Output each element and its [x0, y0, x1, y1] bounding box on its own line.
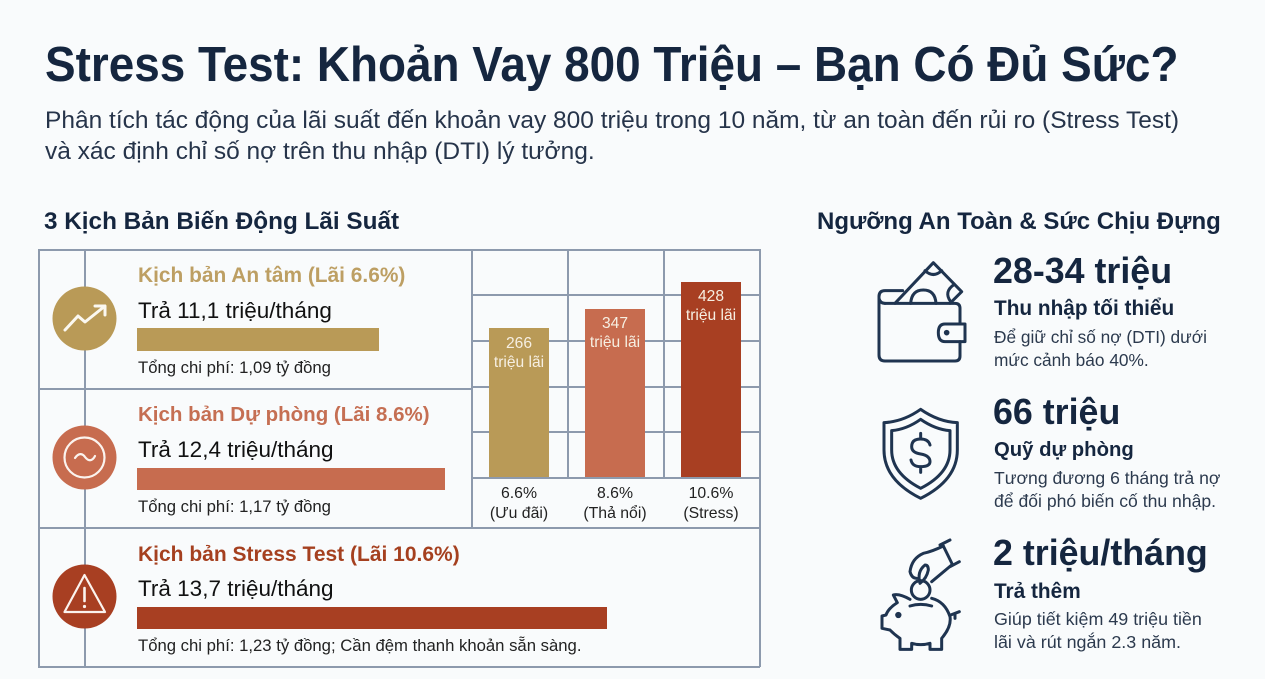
chart bar: 347 million interest — [585, 309, 645, 477]
icon: piggy bank with hand and coin — [880, 538, 961, 651]
chart bar: 428 million interest: 428 — [698, 288, 724, 305]
chart bar: 428 million interest: triệu lãi — [686, 306, 736, 324]
scenario 3 payment: Trả 13,7 triệu/tháng — [138, 576, 334, 601]
stat 3 label: Trả thêm — [994, 580, 1081, 603]
stat 1 value: 28-34 triệu — [993, 251, 1172, 291]
stat 3 description — [994, 609, 1202, 652]
scenario 1 payment: Trả 11,1 triệu/tháng — [138, 298, 332, 323]
scenario 3 bar — [137, 607, 607, 629]
chart bar: 428 million interest — [681, 282, 741, 477]
scenario 2 total cost: Tổng chi phí: 1,17 tỷ đồng — [138, 497, 331, 516]
chart bar: 266 million interest — [489, 328, 549, 477]
axis label 6.6% — [490, 485, 548, 522]
axis label 6.6%: (Ưu đãi) — [490, 505, 548, 522]
scenario 3 total cost: Tổng chi phí: 1,23 tỷ đồng; Cần đệm thanh khoản sẵn sàng. — [138, 636, 581, 655]
icon: shield with dollar — [882, 408, 959, 500]
heading: scenarios: 3 Kịch Bản Biến Động Lãi Suất — [44, 208, 399, 235]
axis label 6.6%: 6.6% — [501, 485, 537, 502]
stat 3 description: lãi và rút ngắn 2.3 năm. — [994, 632, 1181, 652]
scenario 1 bar — [137, 328, 379, 351]
stat 1 description: Để giữ chỉ số nợ (DTI) dưới — [994, 327, 1207, 347]
axis label 8.6%: 8.6% — [597, 485, 633, 502]
stat 2 description: để đối phó biến cố thu nhập. — [994, 491, 1216, 511]
subtitle text: Phân tích tác động của lãi suất đến khoản vay 800 triệu trong 10 năm, từ an toàn đến rủi ro (Stress Test) — [45, 107, 1179, 134]
axis label 10.6%: (Stress) — [683, 505, 739, 522]
axis label 8.6%: (Thả nổi) — [583, 505, 647, 522]
scenario 1 title: Kịch bản An tâm (Lãi 6.6%) — [138, 264, 405, 287]
stat 2 description: Tương đương 6 tháng trả nợ — [994, 468, 1220, 488]
chart bar: 266 million interest: triệu lãi — [494, 354, 544, 370]
subtitle text — [45, 107, 1179, 165]
axis label 10.6% — [683, 485, 739, 522]
axis label 10.6%: 10.6% — [689, 485, 733, 502]
chart bar: 266 million interest: 266 — [506, 335, 532, 352]
scenario 2 title: Kịch bản Dự phòng (Lãi 8.6%) — [138, 403, 430, 426]
stat 1 description — [994, 327, 1207, 370]
stat 2 description — [994, 468, 1220, 511]
scenario 1 total cost: Tổng chi phí: 1,09 tỷ đồng — [138, 358, 331, 377]
stat 2 value: 66 triệu — [993, 392, 1120, 432]
scenario 3 title: Kịch bản Stress Test (Lãi 10.6%) — [138, 543, 460, 566]
chart bar: 347 million interest: 347 — [602, 315, 628, 332]
stat 1 label: Thu nhập tối thiểu — [994, 297, 1174, 320]
title: Stress Test: Khoản Vay 800 Triệu – Bạn Có Đủ Sức? — [45, 38, 1178, 92]
icon: rising trend — [52, 286, 116, 350]
icon: wave circle — [52, 426, 116, 490]
stat 3 value: 2 triệu/tháng — [993, 533, 1208, 573]
chart bar: 347 million interest: triệu lãi — [590, 334, 640, 350]
stat 2 label: Quỹ dự phòng — [994, 439, 1134, 461]
axis label 8.6% — [583, 485, 647, 522]
subtitle text: và xác định chỉ số nợ trên thu nhập (DTI) lý tưởng. — [45, 138, 595, 165]
scenario 2 payment: Trả 12,4 triệu/tháng — [138, 437, 334, 462]
scenario 2 bar — [137, 468, 445, 490]
icon: warning triangle — [52, 564, 116, 628]
stat 1 description: mức cảnh báo 40%. — [994, 350, 1149, 370]
icon: wallet — [878, 261, 966, 362]
stat 3 description: Giúp tiết kiệm 49 triệu tiền — [994, 609, 1202, 629]
heading: safety thresholds: Ngưỡng An Toàn & Sức Chịu Đựng — [817, 208, 1221, 235]
